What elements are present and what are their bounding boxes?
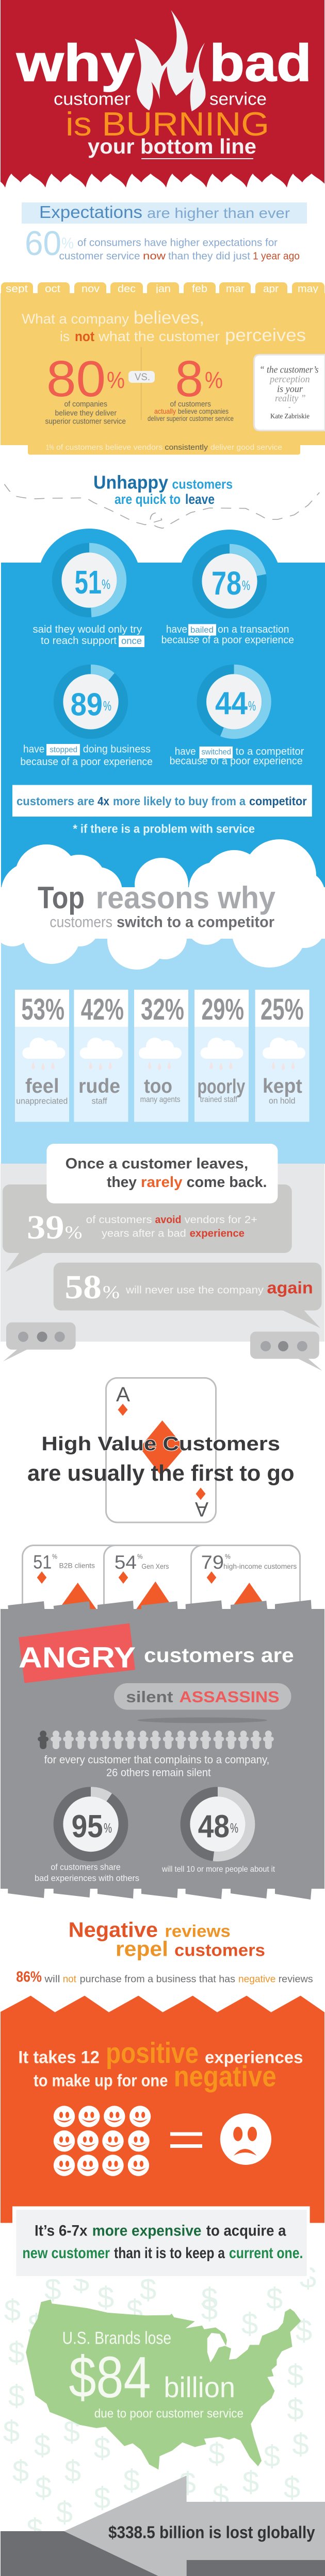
text: reach support once: to reach support [41,635,117,647]
reason card: poorly trained staff: trained staff [200,1095,237,1104]
heading: negative reviews repel customers: customers [174,1940,265,1959]
card: 51 percent B2B clients: 51 [33,1552,52,1573]
reason card: too many agents [134,990,188,1122]
icon: sad face [220,2113,271,2165]
callout: once a customer leaves: rarely [141,1174,183,1191]
background: dollar signs: $ [35,2471,52,2504]
panel: company vs customer perception [1,282,325,454]
chart: donut 95 percent: 95 [72,1809,103,1844]
text: consumers expectations: now [143,250,166,262]
stat: 80 percent: 80 [46,350,106,407]
chart: donut 48 percent [185,1792,250,1857]
heading: what a company believes: is [60,329,70,344]
chart: donut 51 percent: 51 [75,564,102,601]
background: dollar signs [3,2261,316,2546]
chart: donut 95 percent: % [104,1820,112,1836]
callout: once a customer leaves: Once a customer leaves, [66,1156,248,1172]
callout: 4x more likely: customers are [17,794,94,808]
text: consumers expectations: of consumers have higher expectations for [77,237,278,248]
month tabs: dec [118,283,136,295]
heading: expectations: Expectations [39,202,142,222]
panel: angry customers [1,1600,324,1900]
text: 86 percent will not purchase: will [44,1974,60,1985]
callout: quote: reality ” [275,393,306,404]
arrow: lost globally [64,2476,325,2576]
reason card: rude staff: staff [92,1096,107,1106]
heading: unhappy customers [93,472,233,507]
heading: unhappy customers: are quick to [115,492,181,507]
background: dollar signs: $ [241,2307,258,2341]
title: is BURNING: is BURNING [66,105,269,143]
heading: top reasons why: reasons why [96,880,276,915]
card: 54 percent Gen Xers: % [137,1553,143,1561]
text: companies believe: of companies [64,400,107,409]
text: companies believe [45,400,126,426]
heading: what a company believes: what the customer [98,329,220,344]
text: customers believe: actually [154,407,176,415]
callout: quote: is your [277,384,303,395]
card: 54 percent Gen Xers: Gen Xers [141,1562,169,1570]
icon: twelve smiley faces [54,2106,151,2176]
callout: once a customer leaves: come back. [187,1174,267,1191]
text: 86 percent will not purchase [16,1969,313,1985]
text: problem with service note: * if there is a problem with service [73,822,255,835]
text: more expensive: more expensive [92,2223,201,2240]
chart: donut 89 percent: % [103,698,111,714]
reason card: kept on hold: on hold [269,1096,295,1106]
chart: donut 89 percent: 89 [71,687,103,723]
heading: high value customers: are usually the first to go [27,1461,295,1486]
text: reach support once [33,624,144,647]
icon: ace of diamonds card [106,1378,216,1522]
background: dollar signs: $ [73,2264,89,2298]
chart: donut 48 percent: 48 [198,1809,230,1844]
text: bailed on a transaction: bailed [190,625,214,635]
background: dollar signs: $ [28,2308,44,2342]
background: dollar signs: $ [179,2466,196,2500]
month tabs: sept [6,283,28,295]
background: dollar signs: $ [292,2428,309,2461]
text: more expensive: current one. [229,2245,303,2262]
background: dollar signs: $ [63,2415,80,2448]
panel: header [1,0,324,188]
background: dollar signs: $ [64,2454,81,2488]
text: one percent footer [46,443,282,452]
heading: negative reviews repel customers [69,1918,265,1960]
reason card: feel unappreciated: 53% [21,993,64,1026]
card: 51 percent B2B clients: B2B clients [59,1562,95,1570]
month tabs: apr [263,283,279,295]
panel: what should companies do [1,2476,325,2576]
arrow: dashed looping path [5,484,319,528]
text: share bad experiences: bad experiences with others [35,1873,139,1883]
heading: top reasons why: customers [50,914,112,931]
stat: 8 percent [175,350,223,407]
background: dollar signs: $ [123,2464,140,2497]
callout: quote: “ the customer’s [259,365,319,376]
background: dollar signs: $ [201,2282,218,2315]
chart: donut 78 percent [197,549,262,614]
background: dollar signs: $ [94,2481,110,2515]
heading: what a company believes: not [75,329,94,344]
reason card: rude staff: rude [78,1075,120,1097]
panel: high value customers [23,1378,300,1628]
text: 84 billion: $84 [69,2345,151,2410]
text: more expensive: It’s 6-7x [35,2223,88,2240]
panel: top reasons why [0,839,325,1164]
card: 79 percent high-income customers: 79 [201,1552,224,1573]
heading: negative reviews repel customers: reviews [165,1921,231,1940]
heading: top reasons why [38,880,276,931]
background: dollar signs: $ [4,2294,21,2327]
speech bubble: 39 percent: of customers [86,1214,152,1226]
text: 86 percent will not purchase: negative [238,1974,275,1985]
stat: 60 percent: 60 [25,224,61,263]
background: dollar signs: $ [287,2393,304,2426]
chart: donut 48 percent: % [230,1820,238,1836]
month tabs: oct [45,283,60,295]
background: dollar signs: $ [213,2479,229,2513]
month tabs: nov [82,283,100,295]
text: 84 billion: billion [164,2371,235,2403]
icon: large cloud [0,839,325,970]
month tabs: jan [155,283,171,295]
heading: angry customers are: customers are [144,1645,294,1667]
title: bad: bad [209,35,312,92]
text: 86 percent will not purchase: purchase from a business that has [80,1974,235,1985]
speech bubble: 39 percent: vendors for 2+ [185,1214,257,1226]
chart: donut 78 percent: % [242,578,250,593]
text: stopped doing business: doing business [83,743,151,755]
text: stopped doing business [20,743,153,768]
heading: angry customers are: ANGRY [19,1641,136,1674]
text: customers believe: believe companies [178,407,229,415]
background: dollar signs: $ [296,2314,312,2347]
chart: donut 44 percent [202,669,267,734]
icon: flame [135,10,206,111]
reason card: feel unappreciated [15,990,69,1122]
heading: high value customers [27,1433,295,1486]
text: one percent footer: 1% [46,443,54,452]
speech bubble: 39 percent: 39 [27,1209,64,1246]
callout: quote: - [288,403,290,411]
background: dollar signs: $ [266,2282,283,2315]
text: reach support once: said they would only try [33,624,142,635]
heading: unhappy customers: leave [185,492,215,507]
card: 51 percent B2B clients: % [52,1553,57,1561]
text: 86 percent will not purchase: not [63,1974,77,1985]
reason card: too many agents: 32% [141,993,184,1026]
heading: unhappy customers: customers [172,477,233,492]
heading: top reasons why: Top [38,880,85,915]
text: bailed on a transaction: because of a poor experience [161,635,294,646]
text: 84 billion: due to poor customer service [94,2407,243,2420]
title: service: service [209,90,267,109]
reason card: rude staff [74,990,128,1122]
icon: ace of diamonds card: A [116,1383,130,1406]
panel: us brands lose [3,2261,316,2546]
background: dollar signs: $ [126,2294,143,2327]
background: dollar signs: $ [264,2439,280,2473]
reason card: poorly trained staff: poorly [197,1076,246,1098]
month tabs: mar [226,283,245,295]
background: dollar signs: $ [3,2415,20,2448]
text: tell 10 or more people: will tell 10 or more people about it [161,1865,275,1874]
title: your bottom line: your bottom line [88,134,256,158]
background: dollar signs: $ [140,2273,156,2306]
text: switched to a competitor: switched [201,748,231,757]
reason card: feel unappreciated: unappreciated [16,1096,68,1106]
heading: it takes 12 positive: experiences [205,2048,303,2067]
speech bubble: 58 percent: 58 [64,1268,102,1306]
panel: once a customer leaves [1,1144,324,1371]
callout: quote: perception [269,374,310,385]
reason card: poorly trained staff [194,990,249,1122]
text: consumers expectations: than they did just [168,250,250,262]
text: consumers expectations: customer service [59,250,140,262]
text: reach support once: once [121,636,142,646]
callout: 4x more likely: more likely to buy from a [113,794,246,808]
speech bubble: 39 percent [3,1184,292,1272]
text: more expensive [22,2223,303,2262]
reason card: kept on hold [255,990,310,1122]
text: customers believe [148,400,234,422]
icon: ace of diamonds card: A [195,1498,208,1520]
chart: donut 78 percent: 78 [212,565,241,602]
speech bubble: 58 percent: will never use the company [125,1285,264,1296]
panel: quick to leave stats [1,529,325,913]
text: more expensive: to acquire a [206,2223,286,2240]
reason card: too many agents: too [144,1075,172,1097]
speech bubble: typing left [3,1323,76,1361]
title: customer: customer [54,90,131,109]
card: 79 percent high-income customers: % [225,1553,231,1561]
panel: twelve positive experiences [1,1996,324,2223]
text: customers believe: of customers [170,400,211,409]
text: stopped doing business: have [23,743,44,755]
stat: 60 percent: % [61,235,74,252]
card: 79 percent high-income customers [191,1546,300,1628]
text: switched to a competitor: because of a poor experience [170,756,303,767]
text: 86 percent will not purchase: 86% [16,1969,42,1985]
stat: 8 percent: 8 [175,350,203,407]
text: 26 others remain silent: for every customer that complains to a company, [44,1754,269,1766]
text: one percent footer: deliver good service [210,443,282,452]
background: dollar signs: $ [12,2454,29,2488]
badge: silent assassins [114,1683,291,1723]
speech bubble: 39 percent: experience [190,1228,245,1240]
text: one percent footer: consistently [165,443,208,452]
chart: donut 51 percent: % [102,577,110,592]
speech bubble: 58 percent: again [267,1279,313,1297]
text: consumers expectations: 1 year ago [253,250,300,262]
background: dollar signs: $ [242,2465,259,2499]
text: bailed on a transaction: on a transaction [218,624,289,635]
icon: equals sign [170,2132,202,2148]
heading: unhappy customers: Unhappy [93,472,168,493]
callout: once a customer leaves: they [107,1174,137,1191]
text: 84 billion: U.S. Brands lose [62,2329,171,2348]
speech bubble: 58 percent [54,1263,321,1328]
background: dollar signs: $ [8,2379,25,2413]
month tabs [1,282,324,298]
background: dollar signs: $ [201,2293,218,2326]
text: stopped doing business: stopped [50,745,77,754]
heading: top reasons why: switch to a competitor [117,914,274,931]
background: dollar signs: $ [8,2336,25,2369]
background: dollar signs: $ [34,2429,51,2462]
chart: donut 51 percent [57,548,122,613]
chart: donut 44 percent: 44 [215,686,248,721]
text: consumers expectations [59,237,300,262]
heading: are higher than ever: are higher than ever [147,205,290,221]
heading: what a company believes: What a company [22,311,129,327]
stat: 8 percent: % [205,367,223,393]
heading: what a company believes [22,308,306,345]
heading: negative reviews repel customers: Negative [69,1918,158,1941]
speech bubble: 58 percent: % [103,1282,120,1302]
heading: it takes 12 positive: to make up for one [34,2071,168,2090]
heading: what a company believes: perceives [225,326,306,345]
callout: 4x more likely: 4x [98,794,109,808]
stat: 80 percent: % [107,367,125,393]
panel: expectations [22,202,307,263]
panel: acquire vs keep [12,2206,310,2279]
text: switched to a competitor [170,746,304,767]
background: dollar signs: $ [284,2471,300,2504]
month tabs: may [298,283,318,295]
background: dollar signs: $ [26,2513,43,2546]
reason card: poorly trained staff: 29% [201,993,244,1026]
text: bailed on a transaction: have [166,624,187,635]
reason card: rude staff: 42% [81,993,124,1026]
heading: high value customers: High Value Customers [41,1433,280,1455]
text: 26 others remain silent [44,1754,269,1778]
callout: 4x more likely [12,785,312,817]
text: one percent footer: of customers believe vendors [56,443,163,452]
text: companies believe: believe they deliver [55,409,117,417]
text: 26 others remain silent: 26 others remain silent [106,1767,211,1778]
background: dollar signs: $ [98,2281,114,2314]
background: dollar signs: $ [287,2359,304,2392]
card: 54 percent Gen Xers [104,1546,259,1628]
background: dollar signs: $ [56,2496,73,2529]
speech bubble: typing right [250,1332,322,1371]
reason card: feel unappreciated: feel [25,1075,59,1097]
card: 51 percent B2B clients [23,1546,177,1628]
month tabs: feb [192,283,207,295]
badge: vs [128,371,155,383]
card: 79 percent high-income customers: high-income customers [223,1562,297,1570]
badge: vs: VS. [135,372,150,383]
text: more expensive: new customer [22,2245,110,2262]
background: dollar signs: $ [44,2273,61,2306]
callout: quote: Kate Zabriskie [270,413,310,420]
text: companies believe: superior customer service [45,417,126,426]
text: 84 billion [62,2329,243,2420]
heading: it takes 12 positive: negative [174,2060,277,2093]
callout: quote [254,354,325,431]
text: bailed on a transaction [161,624,294,646]
background: dollar signs: $ [208,2437,225,2470]
text: customers believe: deliver superior customer service [148,414,234,422]
text: switched to a competitor: to a competitor [236,746,304,757]
reason card: kept on hold: kept [263,1075,302,1097]
callout: once a customer leaves [46,1144,278,1204]
heading: it takes 12 positive: positive [106,2037,199,2070]
icon: united states map [26,2299,301,2470]
background: dollar signs: $ [94,2431,110,2465]
speech bubble: 39 percent: avoid [155,1214,182,1226]
badge: silent assassins: silent [126,1688,173,1706]
chart: donut 44 percent: % [248,698,256,714]
speech bubble: 39 percent: years after a bad [102,1228,186,1240]
reason card: too many agents: many agents [140,1095,181,1104]
chart: donut 95 percent [58,1792,123,1857]
heading: it takes 12 positive: It takes 12 [18,2048,100,2067]
text: share bad experiences: of customers share [51,1862,121,1872]
title: why: why [16,35,135,92]
icon: row of people [38,1731,274,1749]
heading: it takes 12 positive [18,2037,303,2093]
text: 86 percent will not purchase: reviews [279,1974,313,1985]
text: switched to a competitor: have [175,746,196,757]
callout: 4x more likely: competitor [249,794,307,808]
chart: donut 89 percent [58,669,123,734]
heading: negative reviews repel customers: repel [116,1937,168,1960]
speech bubble: 39 percent: % [65,1222,83,1243]
text: stopped doing business: because of a poor experience [20,756,153,768]
card: 54 percent Gen Xers: 54 [115,1552,137,1573]
text: more expensive: than it is to keep a [114,2245,225,2262]
text: share bad experiences [35,1862,139,1883]
background: dollar signs: $ [300,2261,316,2294]
reason card: kept on hold: 25% [261,993,304,1026]
badge: silent assassins: ASSASSINS [180,1688,280,1706]
heading: what a company believes: believes, [134,308,204,328]
heading: angry customers are [19,1623,294,1683]
